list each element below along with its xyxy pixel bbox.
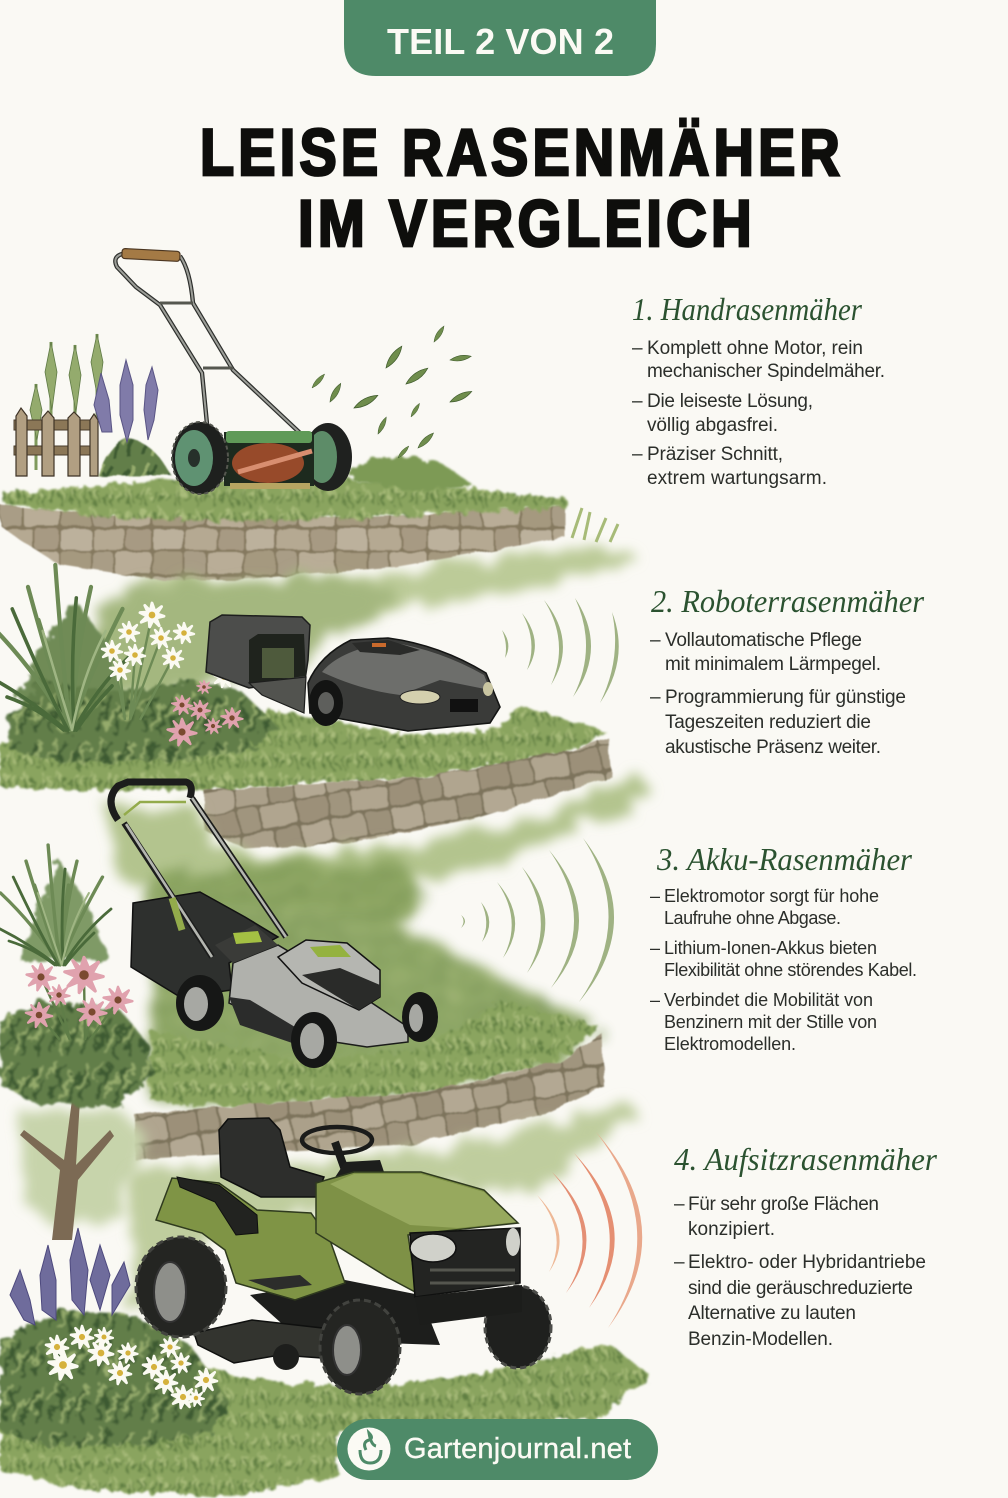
foliage mass behind grass (15, 600, 125, 700)
text block: 4 Aufsitzrasenmäher: Für sehr große Flächen (688, 1194, 879, 1215)
text block: 3 Akku-Rasenmäher: Laufruhe ohne Abgase. (664, 908, 841, 928)
stems (39, 975, 118, 1040)
text block: 3 Akku-Rasenmäher: – (650, 938, 660, 958)
tall grass (0, 565, 133, 730)
green wash behind robot mower (60, 575, 400, 700)
lavender (10, 1228, 130, 1325)
rear body (156, 1178, 345, 1300)
tall grass 3 (0, 845, 111, 965)
grass 1 (2, 480, 566, 521)
stems (112, 615, 173, 720)
icon: sound waves ride-on mower (537, 1132, 642, 1328)
text block: 1 Handrasenmäher: Präziser Schnitt, (647, 444, 783, 465)
text block: 4 Aufsitzrasenmäher: – (674, 1252, 685, 1273)
badge: part label (344, 0, 656, 76)
text block: 1 Handrasenmäher: extrem wartungsarm. (647, 468, 827, 489)
front wheel (320, 1300, 400, 1394)
text block: 2 Roboterrasenmäher (650, 583, 925, 758)
title: LEISE RASENMÄHER (200, 115, 844, 189)
panel: terrace 2 lawn and wall (0, 575, 612, 849)
text block: 4 Aufsitzrasenmäher: 4. Aufsitzrasenmäher (674, 1141, 938, 1177)
text block: 1 Handrasenmäher: mechanischer Spindelmäher. (647, 361, 885, 382)
wall 3 (135, 1033, 604, 1160)
wash around ride-on mower (130, 1103, 640, 1320)
foliage behind tall grass (20, 860, 110, 960)
reel (224, 432, 314, 486)
text block: 1 Handrasenmäher: – (632, 444, 643, 465)
main lawn 3 (150, 858, 600, 1106)
text block: 3 Akku-Rasenmäher: Lithium-Ionen-Akkus bieten (664, 938, 877, 958)
icon: battery mower (111, 782, 438, 1068)
illustration: flower bed 3 with tree (0, 845, 155, 1240)
tree (20, 1100, 114, 1240)
wash top of terrace 3 (100, 775, 650, 920)
motor housing (278, 940, 380, 1010)
text block: 1 Handrasenmäher: – (632, 391, 643, 412)
illustration: flower bed 2 (0, 565, 278, 762)
text block: 3 Akku-Rasenmäher: Flexibilität ohne störendes Kabel. (664, 960, 917, 980)
rear wheel (304, 423, 352, 491)
badge: Gartenjournal.net: Gartenjournal.net (404, 1433, 631, 1465)
badge: Gartenjournal.net (337, 1419, 658, 1480)
steering wheel (302, 1127, 372, 1153)
text block: 4 Aufsitzrasenmäher: Elektro- oder Hybridantriebe (688, 1252, 926, 1273)
hood (316, 1172, 518, 1293)
text block: 2 Roboterrasenmäher: mit minimalem Lärmpegel. (665, 654, 881, 675)
text block: 4 Aufsitzrasenmäher: Alternative zu lauten (688, 1303, 856, 1324)
panel: terrace 3 lawn and wall (100, 775, 650, 1160)
tall grass tuft (352, 456, 474, 492)
panel: terrace 1 grass and wall (0, 456, 640, 620)
text block: 3 Akku-Rasenmäher: – (650, 886, 660, 906)
text block: 2 Roboterrasenmäher: – (650, 630, 661, 651)
icon: docking station (206, 615, 310, 713)
icon: sound waves robot mower (502, 598, 619, 703)
text block: 3 Akku-Rasenmäher: Elektromotor sorgt für hohe (664, 886, 879, 906)
wood handle (122, 248, 180, 261)
text block: 3 Akku-Rasenmäher: Benzinern mit der Stille von (664, 1012, 877, 1032)
small grass at wall end (572, 508, 618, 542)
wall 1 (0, 505, 565, 580)
shrub leaves (0, 1000, 155, 1105)
text block: 2 Roboterrasenmäher: Tageszeiten reduziert die (665, 712, 871, 733)
text block: 2 Roboterrasenmäher: – (650, 687, 661, 708)
text block: 4 Aufsitzrasenmäher (674, 1141, 938, 1350)
deck (229, 945, 408, 1047)
text block: 1 Handrasenmäher: 1. Handrasenmäher (632, 291, 862, 327)
text block: 3 Akku-Rasenmäher: 3. Akku-Rasenmäher (656, 841, 913, 877)
bed foliage (0, 1310, 227, 1445)
badge: part label: TEIL 2 VON 2 (387, 21, 614, 62)
title (200, 115, 844, 260)
text block: 3 Akku-Rasenmäher: Elektromodellen. (664, 1034, 796, 1054)
grass catcher (131, 892, 278, 997)
armrest (177, 1177, 258, 1235)
lawn 2 (0, 705, 608, 790)
illustration: flower bed 4 (0, 1228, 227, 1445)
wall 2 (204, 737, 612, 849)
icon: ride-on mower (136, 1118, 551, 1394)
text block: 3 Akku-Rasenmäher (650, 841, 917, 1054)
bumper (415, 1285, 522, 1325)
mower deck (194, 1320, 350, 1363)
lawn 4 (0, 1340, 650, 1497)
text block: 4 Aufsitzrasenmäher: sind die geräuschreduzierte (688, 1278, 913, 1299)
icon: sound waves battery mower (461, 838, 614, 1002)
front wheel (172, 422, 228, 494)
icon: robot lawn mower (308, 638, 500, 731)
seat (219, 1118, 324, 1197)
tree canopy wash (20, 1110, 150, 1230)
text block: 2 Roboterrasenmäher: Vollautomatische Pflege (665, 630, 862, 651)
icon: reel lawn mower (115, 248, 352, 494)
text block: 2 Roboterrasenmäher: Programmierung für günstige (665, 687, 906, 708)
text block: 2 Roboterrasenmäher: 2. Roboterrasenmäher (651, 583, 925, 619)
undercarriage (250, 1280, 440, 1345)
illustration: garden bed with fence and lavender (14, 334, 172, 476)
right front wheel (485, 1286, 551, 1368)
panel: terrace 4 lawn (0, 1103, 650, 1497)
rear wheel (136, 1237, 226, 1337)
text block: 1 Handrasenmäher: – (632, 338, 643, 359)
title: IM VERGLEICH (298, 186, 756, 260)
text block: 1 Handrasenmäher (632, 291, 885, 489)
pale wash below wall 1 (150, 545, 640, 620)
bed foliage (8, 680, 278, 762)
text block: 4 Aufsitzrasenmäher: konzipiert. (688, 1219, 775, 1240)
wheels (176, 975, 224, 1031)
text block: 1 Handrasenmäher: Die leiseste Lösung, (647, 391, 813, 412)
text block: 2 Roboterrasenmäher: akustische Präsenz weiter. (665, 737, 881, 758)
text block: 4 Aufsitzrasenmäher: – (674, 1194, 685, 1215)
text block: 1 Handrasenmäher: völlig abgasfrei. (647, 415, 778, 436)
caster wheel (273, 1344, 299, 1370)
front grille (410, 1228, 520, 1297)
text block: 1 Handrasenmäher: Komplett ohne Motor, rein (647, 338, 863, 359)
text block: 3 Akku-Rasenmäher: – (650, 990, 660, 1010)
mower frame (115, 254, 300, 433)
mower handle (111, 782, 191, 820)
text block: 3 Akku-Rasenmäher: Verbindet die Mobilität von (664, 990, 873, 1010)
foot plate (248, 1275, 312, 1290)
icon: logo (348, 1428, 390, 1470)
lawn 3 crisp front edge (150, 1000, 600, 1106)
text block: 4 Aufsitzrasenmäher: Benzin-Modellen. (688, 1329, 833, 1350)
icon: flying grass clippings (312, 326, 472, 458)
